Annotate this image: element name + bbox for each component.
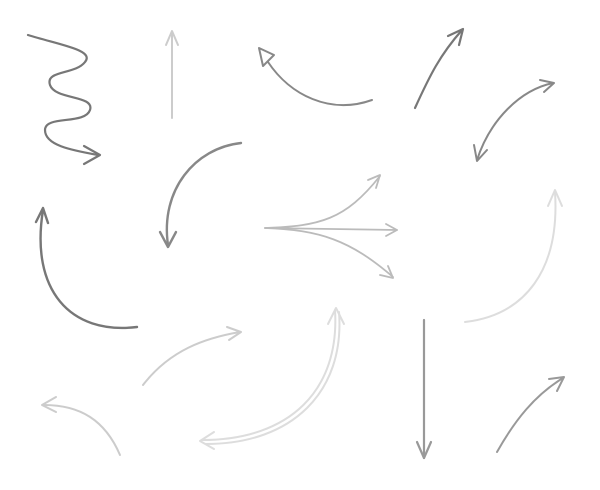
arrow: right light curve up [465, 190, 562, 322]
arrow: light up-right [143, 327, 241, 385]
arrow: double-headed curve [474, 80, 554, 161]
arrow: up-right gray [497, 377, 564, 452]
arrow: squiggle [28, 35, 100, 164]
arrow: three-way fork [265, 175, 397, 278]
arrow: left curve up dark [36, 208, 137, 328]
arrow: up-right dark [415, 29, 463, 108]
arrow: curve down [160, 143, 241, 247]
arrow: light left curve [42, 397, 120, 455]
arrow: curve with hollow head [259, 48, 372, 105]
arrow: vertical up light [166, 31, 178, 118]
arrow: large light curve [200, 308, 344, 449]
arrow: vertical down [417, 320, 431, 458]
